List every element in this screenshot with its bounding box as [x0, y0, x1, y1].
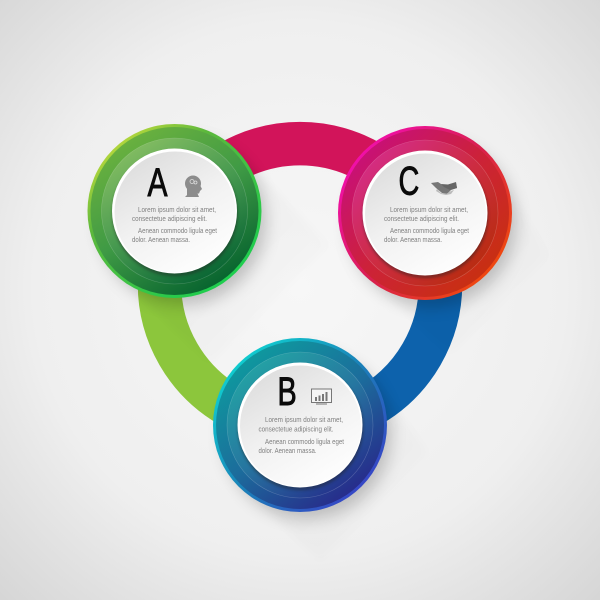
- inner ring: [102, 138, 248, 284]
- ring segment: green: [160, 284, 230, 406]
- inner ring: [352, 140, 498, 286]
- outer ring: [88, 124, 262, 298]
- inner ring: [227, 352, 373, 498]
- drop shadow: [223, 351, 391, 519]
- outer ring: [338, 126, 512, 300]
- body text: Aenean commodo ligula eget: [138, 226, 218, 235]
- face rim: [112, 148, 237, 274]
- middle ring: [341, 129, 509, 297]
- icon: handshake: [431, 182, 457, 195]
- body text: dolor. Aenean massa.: [384, 235, 442, 244]
- letter: B: [278, 369, 297, 414]
- body text: consectetue adipiscing elit.: [132, 214, 207, 223]
- face shadow: [362, 152, 488, 278]
- body text: [384, 205, 470, 244]
- circle B: [213, 338, 391, 519]
- face rim: [362, 150, 488, 276]
- body text: dolor. Aenean massa.: [258, 446, 316, 455]
- long shadows: [115, 150, 550, 563]
- letter: C: [398, 159, 419, 204]
- drop shadow: [98, 137, 266, 305]
- face: [240, 366, 361, 486]
- middle ring: [216, 341, 384, 509]
- body text: consectetue adipiscing elit.: [384, 214, 459, 223]
- icon: head with gears: [185, 176, 202, 197]
- icon: monitor with bar chart: [312, 389, 332, 404]
- letter: A: [148, 161, 168, 205]
- body text: dolor. Aenean massa.: [132, 235, 190, 244]
- circle A: [88, 124, 266, 305]
- drop shadow: [348, 139, 516, 307]
- body text: Lorem ipsum dolor sit amet,: [265, 415, 343, 424]
- ring segment: blue: [370, 284, 440, 406]
- body text: Aenean commodo ligula eget: [265, 437, 345, 446]
- body text: [258, 415, 345, 455]
- body text: Lorem ipsum dolor sit amet,: [390, 205, 468, 214]
- face shadow: [112, 150, 238, 276]
- body text: [132, 205, 218, 244]
- ring segment: crimson: [201, 144, 399, 185]
- circle C: [338, 126, 516, 307]
- face rim: [238, 362, 362, 488]
- connecting ring: [160, 144, 440, 406]
- face: [114, 152, 236, 272]
- body text: consectetue adipiscing elit.: [258, 424, 334, 434]
- middle ring: [90, 127, 258, 295]
- body text: Aenean commodo ligula eget: [390, 226, 470, 235]
- body text: Lorem ipsum dolor sit amet,: [138, 205, 216, 214]
- outer ring: [213, 338, 387, 512]
- face shadow: [238, 364, 364, 490]
- face: [365, 154, 486, 274]
